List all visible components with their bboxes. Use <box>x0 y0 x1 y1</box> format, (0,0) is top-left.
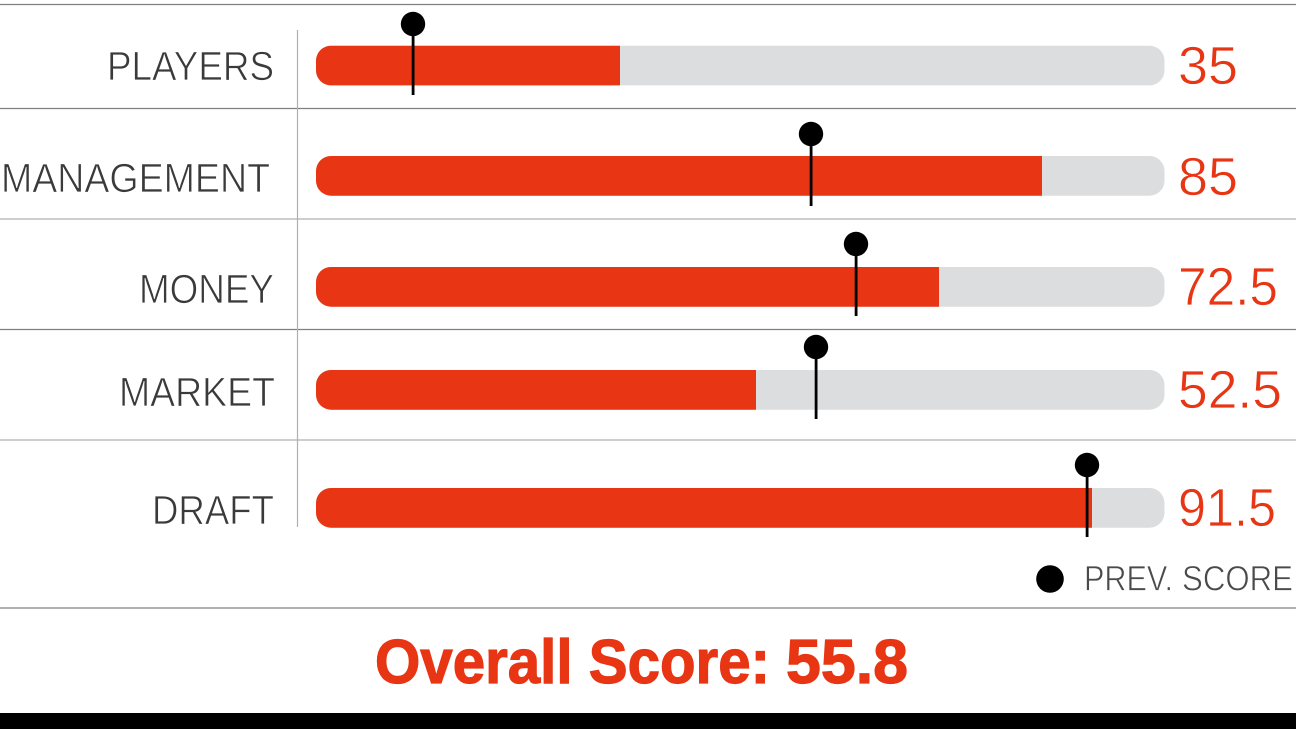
label: market: MARKET <box>119 369 275 415</box>
marker: management previous score <box>799 122 823 206</box>
label: players: PLAYERS <box>107 43 274 89</box>
legend: previous score <box>1036 560 1293 598</box>
row: management <box>1 122 1238 207</box>
marker: money previous score <box>844 232 868 316</box>
bottom black band <box>0 713 1296 729</box>
overall score: 55.8 <box>786 628 908 697</box>
label: money: MONEY <box>139 266 274 312</box>
bar: management <box>316 156 1164 196</box>
value: market: 52.5 <box>1178 360 1282 420</box>
row: draft <box>152 453 1276 538</box>
marker: players previous score <box>401 12 425 95</box>
bar: market <box>316 370 1164 410</box>
value: draft: 91.5 <box>1178 478 1276 538</box>
legend: previous score: PREV. <box>1084 560 1173 598</box>
value: money: 72.5 <box>1178 257 1278 317</box>
row: players <box>107 12 1238 96</box>
label: draft: DRAFT <box>152 487 274 533</box>
bar: draft <box>316 488 1164 528</box>
value: players: 35 <box>1178 36 1238 96</box>
label: management: MANAGEMENT <box>1 155 270 201</box>
value: management: 85 <box>1178 147 1238 207</box>
row: money <box>139 232 1278 317</box>
bar: players <box>316 46 1164 85</box>
overall score: Overall Score: <box>375 628 770 697</box>
row: market <box>119 335 1282 420</box>
marker: market previous score <box>804 335 828 419</box>
bar: money <box>316 267 1164 307</box>
marker: draft previous score <box>1075 453 1099 537</box>
